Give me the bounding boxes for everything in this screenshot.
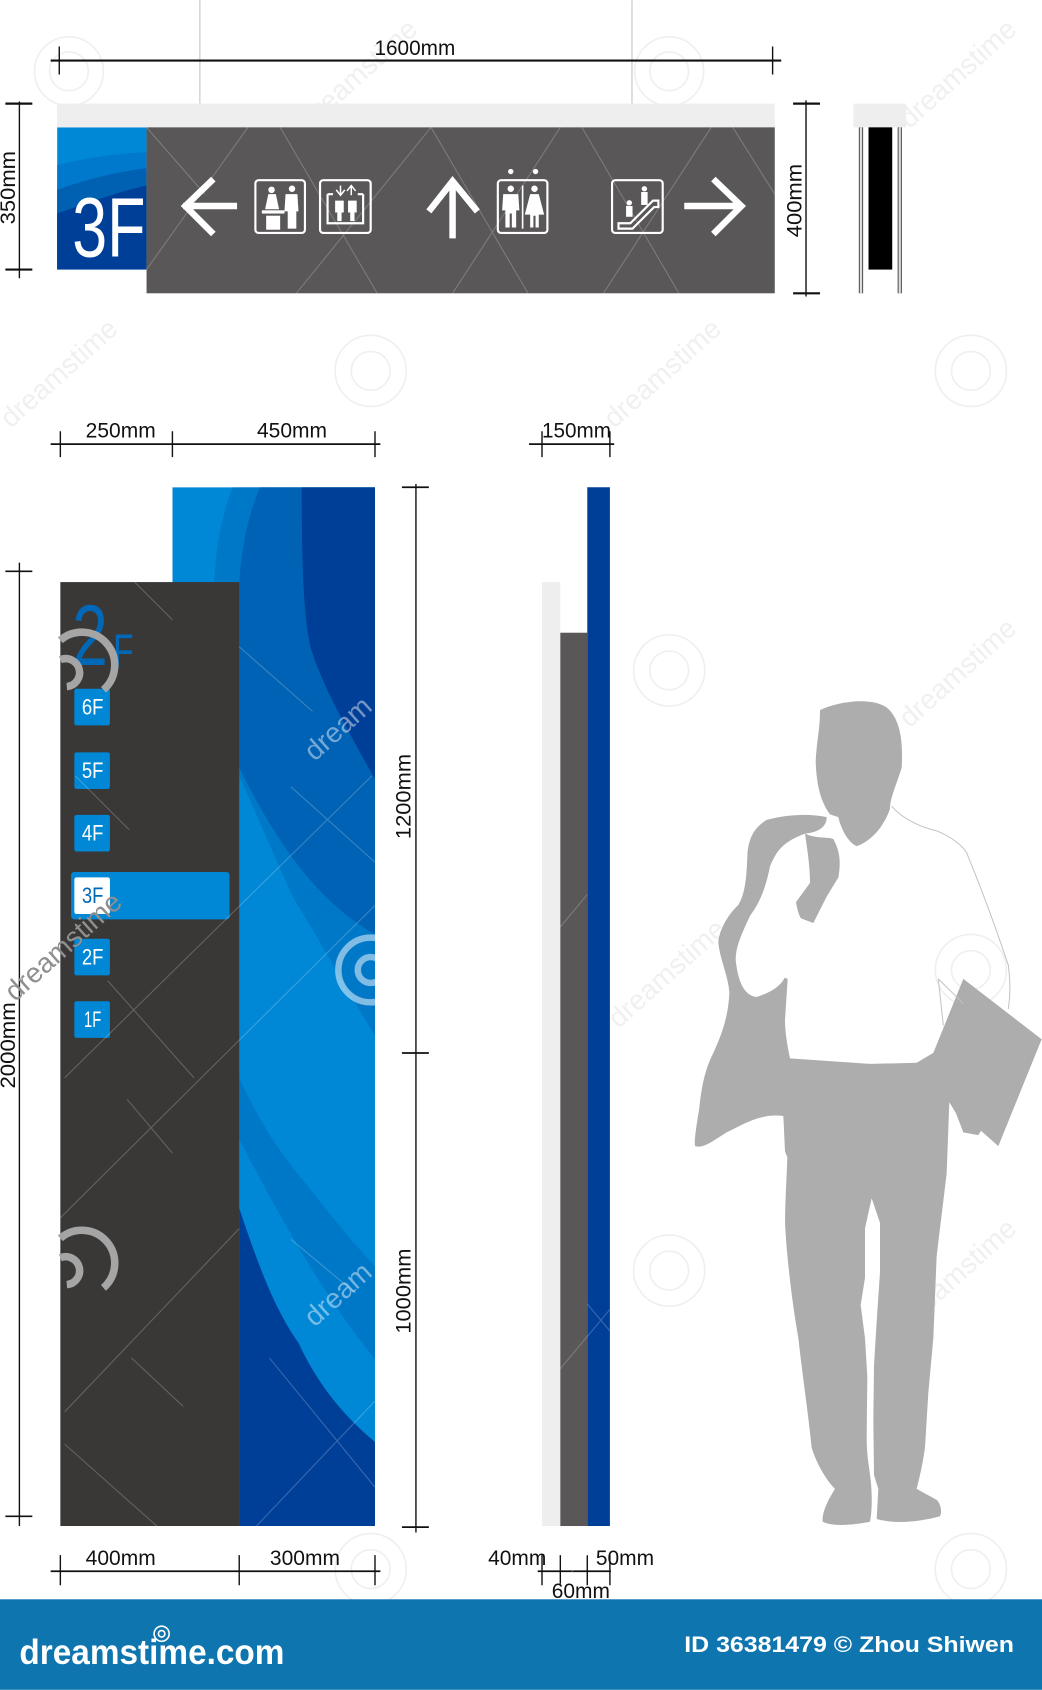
watermark words on white: dreamstime	[893, 612, 1022, 733]
mounting band	[57, 104, 775, 127]
shirt outline	[892, 806, 1010, 1025]
current floor label 2F: 2	[72, 588, 108, 684]
dimension: 40mm, 60mm and 50mm	[488, 1545, 654, 1603]
logo wordmark: dreamstime.com	[19, 1632, 284, 1672]
dimension: 1200mm and 1000mm	[391, 484, 429, 1532]
dark watermark spiral accents	[60, 632, 115, 1288]
image credit: ID 36381479 © Zhou Shiwen	[684, 1632, 1014, 1657]
hanging sign side view	[853, 104, 906, 293]
watermark spirals on panels	[338, 938, 403, 1002]
logo spiral	[154, 1626, 169, 1641]
watermark words on white: dreamstime	[602, 913, 731, 1034]
watermark words on white: dreamstime	[294, 13, 423, 134]
dimension: 400mm	[782, 100, 820, 297]
icon: restroom	[498, 169, 547, 233]
floor list: 4F	[82, 821, 103, 846]
current floor label 2F: F	[113, 625, 134, 678]
footer bar	[0, 1599, 1042, 1690]
dimension: 40mm, 60mm and 50mm: 40mm	[488, 1545, 546, 1570]
dimension: 250mm and 450mm: 450mm	[257, 418, 327, 443]
freestanding sign side view	[542, 487, 610, 1526]
watermark words on white	[0, 13, 1022, 1333]
dimension: 150mm	[529, 418, 614, 457]
dark directory panel	[60, 582, 239, 1526]
icon: service desk	[255, 180, 305, 233]
watermark words on panels: dream	[298, 690, 378, 766]
floor list: 3F	[82, 883, 103, 908]
hanging sign front view	[57, 104, 775, 293]
watermark words on white: dreamstime	[893, 1212, 1022, 1333]
arrow left	[183, 179, 237, 234]
watermark words on white: dreamstime	[597, 313, 727, 434]
dimension: 400mm and 300mm: 400mm	[86, 1545, 156, 1570]
floor label 3F: 3F	[72, 181, 145, 275]
dimension: 40mm, 60mm and 50mm: 60mm	[552, 1578, 610, 1603]
hanging sign: suspension lines	[200, 0, 632, 104]
dimension: 250mm and 450mm	[51, 418, 380, 457]
hand holding jacket	[796, 834, 840, 923]
dimension: 400mm and 300mm	[51, 1545, 380, 1585]
dimension: 40mm, 60mm and 50mm: 50mm	[596, 1545, 654, 1570]
floor list	[71, 689, 230, 1038]
dark direction panel	[147, 127, 775, 293]
dimension: 250mm and 450mm: 250mm	[86, 418, 156, 443]
watermark words on panels: dream	[298, 1256, 378, 1332]
watermark words on panels: dreamstime	[0, 886, 128, 1007]
watermark words on white: dreamstime	[893, 13, 1022, 134]
floor list: 5F	[82, 758, 103, 783]
dimension: 1600mm: 1600mm	[374, 35, 455, 60]
floor list: 1F	[84, 1007, 101, 1032]
dimension: 2000mm	[0, 563, 32, 1526]
dimension: 400mm and 300mm: 300mm	[270, 1545, 340, 1570]
dimension: 1200mm and 1000mm: 1200mm	[391, 754, 416, 839]
floor list: 2F	[82, 945, 103, 970]
blue wave panel	[172, 487, 375, 1526]
watermark pattern lines	[60, 127, 775, 1584]
freestanding sign front view	[60, 487, 375, 1526]
human silhouette for scale	[695, 701, 1042, 1525]
dimension: 400mm: 400mm	[782, 164, 807, 237]
blue floor panel	[57, 127, 147, 270]
dimension: 350mm	[0, 101, 32, 278]
icon: elevator	[320, 180, 371, 233]
floor list: 6F	[82, 695, 103, 720]
dimension: 1600mm	[51, 35, 781, 75]
dimension: 150mm: 150mm	[542, 418, 611, 443]
head	[816, 701, 902, 846]
watermark words on panels	[0, 690, 378, 1332]
arrow up	[429, 181, 477, 238]
dimension: 1200mm and 1000mm: 1000mm	[391, 1249, 416, 1334]
icon: escalator	[612, 180, 663, 233]
arrow right	[684, 179, 741, 234]
body and jacket	[695, 815, 1042, 1525]
